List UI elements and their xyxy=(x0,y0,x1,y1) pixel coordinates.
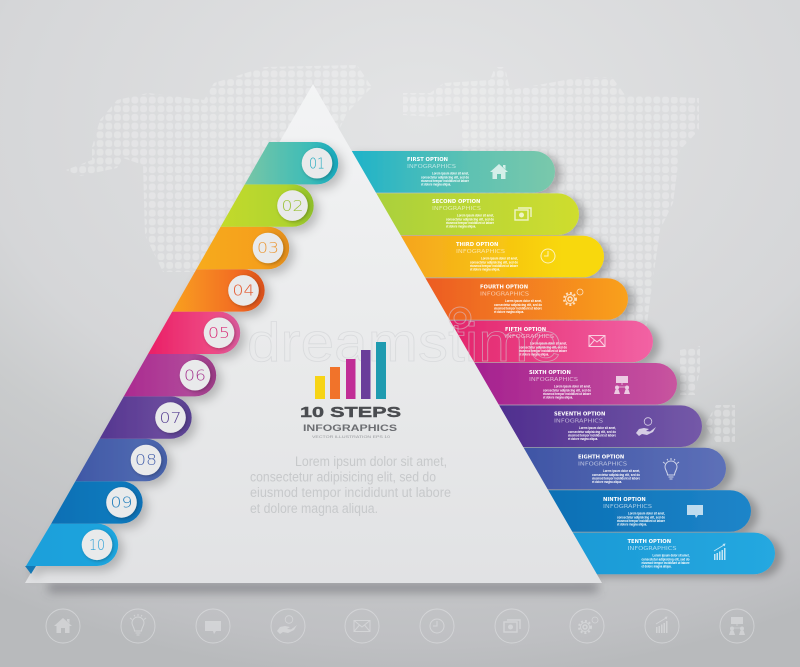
text: first option: consectetur adipisicing elit, sed do xyxy=(421,176,470,180)
text: seventh option: INFOGRAPHICS xyxy=(554,418,604,424)
band 3 right xyxy=(396,236,604,277)
bottom icon: clock xyxy=(420,609,454,643)
text: sixth option: INFOGRAPHICS xyxy=(529,377,579,383)
watermark: dreamstime xyxy=(247,311,562,373)
step 06 xyxy=(124,354,216,396)
step 02 xyxy=(221,184,314,227)
text: fifth option: INFOGRAPHICS xyxy=(505,334,555,340)
text: sixth option: eiusmod tempor incididunt ut labore xyxy=(543,392,591,396)
text: eighth option: eiusmod tempor incididunt ut labore xyxy=(592,476,640,480)
text: first option xyxy=(407,157,470,186)
text: eighth option xyxy=(578,454,641,484)
text: first option: FIRST OPTION xyxy=(407,157,448,163)
text: eighth option: consectetur adipisicing elit, sed do xyxy=(592,473,641,477)
icon: light bulb xyxy=(663,458,679,479)
step 07 xyxy=(100,396,192,439)
step 03: 03 xyxy=(257,239,279,257)
text: third option xyxy=(456,242,519,272)
text: fifth option xyxy=(505,327,568,356)
text: tenth option: consectetur adipisicing elit, sed do xyxy=(642,558,690,562)
text: ninth option: Lorem ipsum dolor sit amet, xyxy=(628,512,665,516)
text: fourth option: FOURTH OPTION xyxy=(480,284,528,290)
text: first option: eiusmod tempor incididunt ut labore xyxy=(421,179,469,183)
text: tenth option xyxy=(628,539,690,568)
icon: gears xyxy=(564,289,583,305)
bottom icon: gears xyxy=(570,609,604,643)
text: fourth option: Lorem ipsum dolor sit amet, xyxy=(505,299,542,303)
text: eighth option: Lorem ipsum dolor sit amet, xyxy=(603,469,640,473)
text: fourth option xyxy=(480,284,543,314)
step 08 xyxy=(75,439,167,481)
step 08: 08 xyxy=(135,451,157,469)
text: fifth option: Lorem ipsum dolor sit amet, xyxy=(530,342,567,346)
text: second option: INFOGRAPHICS xyxy=(432,206,482,212)
text: fifth option: eiusmod tempor incididunt ut labore xyxy=(519,349,567,353)
text: ninth option: INFOGRAPHICS xyxy=(603,504,653,510)
band 2 right xyxy=(371,193,579,235)
text: first option: et dolore magna aliqua. xyxy=(421,182,451,186)
sub-heading: infographics: INFOGRAPHICS xyxy=(303,423,397,434)
text: seventh option: consectetur adipisicing elit, sed do xyxy=(568,430,617,434)
text: ninth option xyxy=(603,497,666,526)
text: eighth option: INFOGRAPHICS xyxy=(578,462,628,468)
text: third option: eiusmod tempor incididunt ut labore xyxy=(470,264,518,268)
band 1 right xyxy=(347,151,555,193)
text: first option: Lorem ipsum dolor sit amet, xyxy=(432,172,469,176)
icon row xyxy=(46,609,754,643)
step 04 xyxy=(172,269,265,312)
text: tenth option: TENTH OPTION xyxy=(628,539,671,545)
text block: lorem ipsum: consectetur adipisicing elit, sed do xyxy=(250,470,436,484)
text: sixth option: et dolore magna aliqua. xyxy=(543,396,573,400)
step 10: 10 xyxy=(89,536,105,554)
band 4 right xyxy=(420,278,628,320)
text: second option: eiusmod tempor incididunt ut labore xyxy=(446,221,494,225)
bottom icon: bulb xyxy=(121,609,155,643)
text: ninth option: NINTH OPTION xyxy=(603,497,646,503)
text: first option: INFOGRAPHICS xyxy=(407,164,457,170)
text: fourth option: consectetur adipisicing elit, sed do xyxy=(494,303,543,307)
text block: lorem ipsum: et dolore magna aliqua. xyxy=(250,501,378,516)
text: fifth option: et dolore magna aliqua. xyxy=(519,352,549,356)
pyramid shadow xyxy=(48,583,598,592)
text: sixth option: Lorem ipsum dolor sit amet, xyxy=(554,384,591,388)
text: sixth option: SIXTH OPTION xyxy=(529,370,571,376)
text: eighth option: EIGHTH OPTION xyxy=(578,454,624,460)
icon: home xyxy=(490,164,508,179)
text: ninth option: et dolore magna aliqua. xyxy=(617,522,647,526)
band 10 right xyxy=(568,533,775,574)
step 10 fold xyxy=(25,566,36,574)
band 9 right xyxy=(543,490,751,532)
text: seventh option: eiusmod tempor incididunt ut labore xyxy=(568,434,616,438)
text: sixth option: consectetur adipisicing elit, sed do xyxy=(543,388,592,392)
text: seventh option: Lorem ipsum dolor sit amet, xyxy=(579,426,616,430)
text block: lorem ipsum: eiusmod tempor incididunt ut labore xyxy=(250,485,451,500)
bar chart logo xyxy=(315,342,386,399)
text: fifth option: FIFTH OPTION xyxy=(505,327,546,333)
icon: mail xyxy=(589,336,605,346)
icon: clock xyxy=(541,249,555,263)
text: third option: consectetur adipisicing elit, sed do xyxy=(470,260,519,264)
text: third option: Lorem ipsum dolor sit amet, xyxy=(481,256,518,260)
text: third option: THIRD OPTION xyxy=(456,242,498,248)
text: third option: et dolore magna aliqua. xyxy=(470,268,500,272)
step 01: 01 xyxy=(309,154,325,172)
bottom icon: home xyxy=(46,609,80,643)
text: fourth option: INFOGRAPHICS xyxy=(480,292,530,298)
text: seventh option: SEVENTH OPTION xyxy=(554,412,605,418)
pyramid xyxy=(25,84,602,583)
bottom icon: hand xyxy=(271,609,305,643)
text: ninth option: consectetur adipisicing elit, sed do xyxy=(617,516,666,520)
icon: money xyxy=(515,208,531,220)
text: third option: INFOGRAPHICS xyxy=(456,249,506,255)
step 03 xyxy=(196,227,289,269)
text: tenth option: et dolore magna aliqua. xyxy=(642,564,672,568)
text block: lorem ipsum: Lorem ipsum dolor sit amet, xyxy=(295,454,447,469)
step 04: 04 xyxy=(232,282,254,300)
text: tenth option: Lorem ipsum dolor sit amet, xyxy=(652,554,690,558)
text: seventh option xyxy=(554,412,617,441)
text: tenth option: INFOGRAPHICS xyxy=(628,546,677,552)
step 09 xyxy=(51,481,143,524)
text: second option: consectetur adipisicing elit, sed do xyxy=(446,218,495,222)
text: seventh option: et dolore magna aliqua. xyxy=(568,437,598,441)
text: second option: Lorem ipsum dolor sit amet, xyxy=(457,214,494,218)
step 05 xyxy=(148,312,240,354)
text: second option: SECOND OPTION xyxy=(432,199,480,205)
band 7 right xyxy=(494,405,702,447)
icon: organisation xyxy=(614,376,630,394)
step 06: 06 xyxy=(184,366,206,384)
text: ninth option: eiusmod tempor incididunt ut labore xyxy=(617,519,665,523)
bottom icon: organisation xyxy=(720,609,754,643)
bottom icon: money xyxy=(495,609,529,643)
step 07: 07 xyxy=(160,409,182,427)
world map of dots xyxy=(66,65,735,442)
step 01 xyxy=(245,142,338,184)
text: eighth option: et dolore magna aliqua. xyxy=(592,480,622,484)
band 5 right xyxy=(445,321,653,362)
step 10 xyxy=(26,524,118,566)
text block: lorem ipsum xyxy=(250,454,451,516)
text: tenth option: eiusmod tempor incididunt ut labore xyxy=(642,561,690,565)
step 05: 05 xyxy=(208,324,230,342)
bottom icon: mail xyxy=(345,609,379,643)
text: fifth option: consectetur adipisicing elit, sed do xyxy=(519,346,568,350)
icon: chat bubble xyxy=(687,505,703,518)
text: sixth option xyxy=(529,370,592,400)
caption: vector illustration: VECTOR ILLUSTRATION EPS 10 xyxy=(312,435,390,439)
text: second option xyxy=(432,199,495,228)
bottom icon: chat xyxy=(196,609,230,643)
band 8 right xyxy=(519,448,726,489)
step 09: 09 xyxy=(110,494,132,512)
bottom icon: chart xyxy=(645,609,679,643)
band 6 right xyxy=(469,363,677,405)
text: fourth option: eiusmod tempor incididunt ut labore xyxy=(494,306,542,310)
text: fourth option: et dolore magna aliqua. xyxy=(494,310,524,314)
icon: hand with coin xyxy=(636,418,656,436)
panel: right option bands xyxy=(347,151,775,574)
panel: left numbered steps xyxy=(25,142,338,574)
step 02: 02 xyxy=(282,197,304,215)
heading: 10 steps: 10 STEPS xyxy=(300,405,401,421)
text: second option: et dolore magna aliqua. xyxy=(446,224,476,228)
icon: growth chart xyxy=(714,544,726,560)
